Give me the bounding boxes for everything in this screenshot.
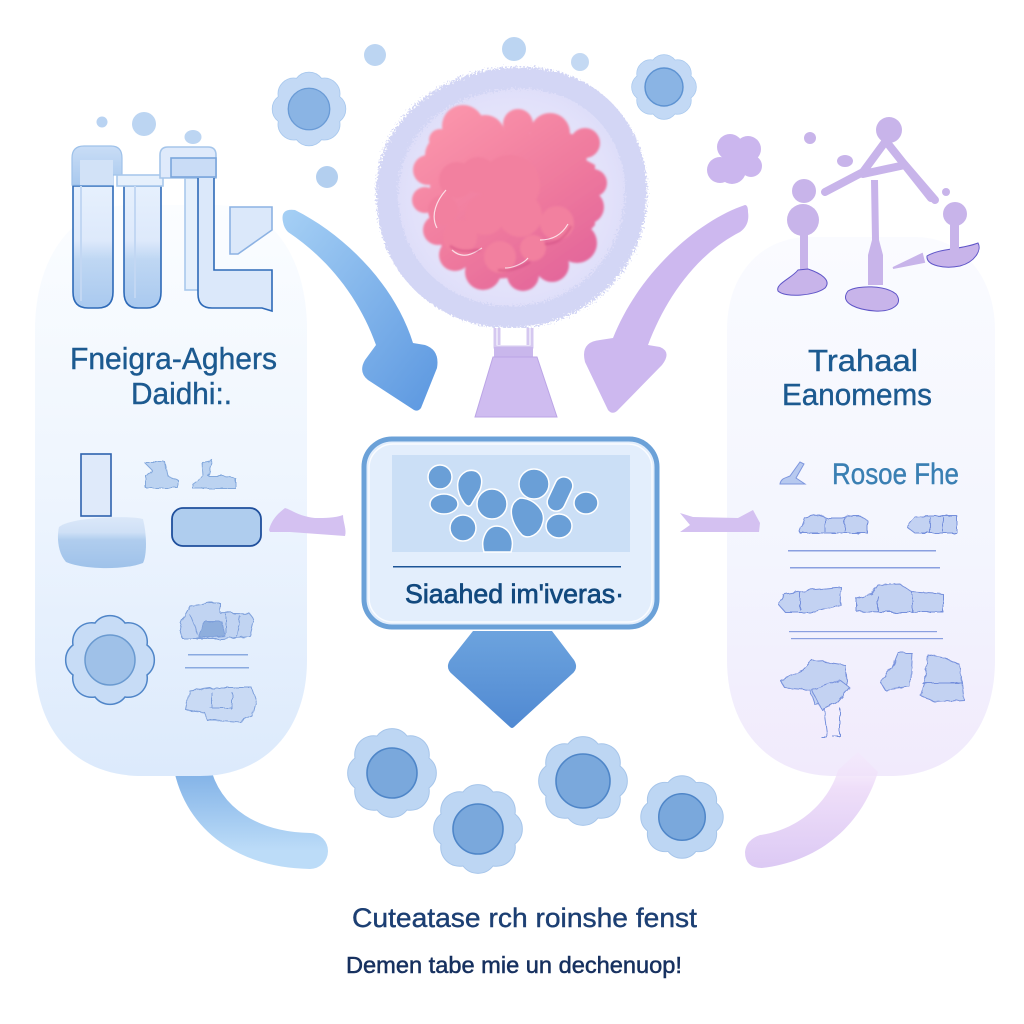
rock row 2 left (779, 587, 841, 612)
illustration: tumour cell (387, 76, 636, 417)
right figure neck (950, 224, 959, 252)
divider line 1 (188, 654, 248, 656)
rock row 3 left (780, 660, 847, 705)
stand base (475, 357, 557, 417)
rock row 3 lower chunk (812, 680, 850, 710)
rock row 1 right (907, 516, 957, 533)
scale dot 1 (804, 132, 816, 144)
right divider line 2 (790, 567, 940, 568)
right panel heading (782, 343, 932, 412)
bottom cells (348, 729, 723, 873)
bubble 1 (96, 116, 108, 128)
heading line 1: Trahaal (808, 343, 918, 378)
card frame (364, 439, 657, 627)
left panel heading (70, 341, 277, 411)
image area (392, 455, 630, 552)
tube 2 cap (117, 175, 163, 186)
bubble 6 (502, 37, 526, 61)
right divider line 4 (791, 638, 943, 639)
tube 1 cap (72, 146, 122, 185)
right sub-heading: Rosoe Fhe (832, 458, 959, 491)
connector: purple right (680, 510, 760, 532)
scale top knob (876, 117, 902, 143)
icon: purple blob (707, 134, 762, 184)
cell cluster (428, 465, 598, 552)
scale dot 2 (837, 155, 853, 167)
small sketch glyph (780, 462, 805, 484)
rock row 3 legs (822, 708, 840, 738)
elbow tube (198, 178, 272, 311)
card divider (393, 566, 621, 568)
central card (364, 439, 657, 627)
icon: rounded capsule (172, 508, 261, 546)
right figure (943, 202, 967, 226)
pink shadows (450, 226, 571, 271)
icon: lab tubes (72, 146, 272, 311)
heading line 1: Fneigra-Aghers (70, 341, 277, 376)
centre base (845, 287, 899, 311)
left base (778, 269, 827, 295)
scale dot 3 (942, 188, 950, 196)
card inner line (369, 444, 652, 622)
rock sketches: right (779, 515, 964, 738)
heading line 2: Eanomems (782, 377, 932, 412)
footer subheading: Demen tabe mie un dechenuop! (346, 952, 682, 978)
cell 1 (348, 729, 436, 817)
arrow: blue curved (282, 210, 438, 411)
cell body (388, 76, 636, 320)
icon: cell top right (632, 55, 696, 119)
tube 2 highlight (134, 186, 136, 298)
rock row 3 middle (880, 653, 912, 690)
rock row 1 left (800, 515, 867, 533)
flask neck (81, 454, 111, 516)
small sketch glyph 1 (144, 462, 178, 488)
tube 1 highlight (80, 186, 82, 301)
icon: cell top left (272, 72, 346, 146)
divider line 2 (185, 667, 249, 668)
left figure body (787, 204, 819, 236)
right side bar (893, 254, 924, 268)
tube 1 cap inner (80, 160, 113, 185)
connector curve: right bottom (745, 752, 878, 868)
arrow: purple curved (584, 205, 748, 413)
bubble 3 (184, 130, 202, 144)
stand neck (495, 328, 532, 347)
card label: Siaahed im'iveras· (405, 579, 624, 609)
right figure base (927, 243, 979, 267)
pink mass (412, 105, 607, 291)
pink highlights (434, 190, 568, 268)
connector: purple left (269, 508, 346, 536)
left figure stem (800, 230, 808, 272)
flask body (58, 517, 146, 568)
right divider line 3 (789, 631, 937, 632)
icon: flask with stopper (58, 454, 146, 568)
icon: left cell (66, 616, 154, 704)
panel: left (35, 205, 307, 776)
cell 2 (434, 785, 522, 873)
bubble 5 (364, 44, 386, 66)
bubble 7 (571, 53, 589, 71)
tube 3 cap (160, 147, 216, 178)
tube 1 (73, 186, 113, 308)
panel: right (727, 237, 995, 776)
scale arms (825, 138, 935, 200)
rock sketch: left lower (186, 688, 256, 722)
icon: balance scale (778, 117, 979, 311)
bubble 2 (132, 112, 156, 136)
rough membrane (387, 78, 636, 317)
right divider line 1 (788, 550, 936, 552)
left figure (792, 179, 816, 203)
pink front lobes (428, 155, 574, 273)
arrow: blue diamond (448, 631, 576, 728)
bubble 4 (316, 166, 338, 188)
heading line 2: Daidhi:. (131, 376, 232, 411)
cell 3 (539, 737, 627, 825)
rock sketch: left upper (180, 603, 254, 639)
tube 2 (124, 186, 161, 308)
small sketch glyph 2 (192, 460, 235, 488)
connector curve: left bottom (192, 768, 310, 851)
rock row 2 right (856, 584, 943, 612)
tube 3 inner bar (171, 158, 216, 177)
scale column (868, 180, 883, 285)
stand collar (494, 347, 533, 357)
tube 3 stem (185, 178, 200, 290)
rock row 3 right (920, 655, 964, 702)
footer heading: Cuteatase rch roinshe fenst (352, 903, 698, 933)
cell 4 (641, 776, 723, 858)
side box (230, 207, 272, 254)
